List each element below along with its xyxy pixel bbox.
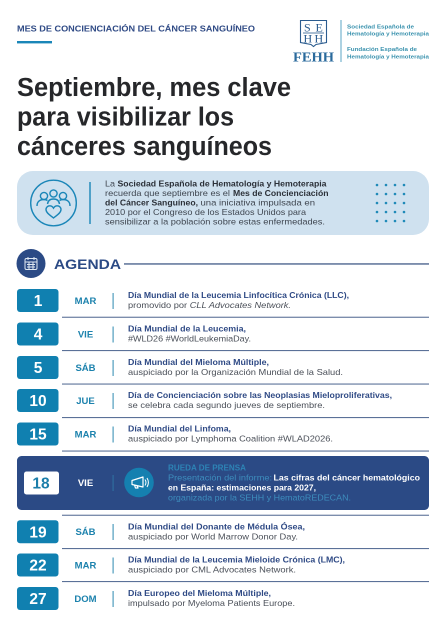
agenda row: 22 MAR: auspiciado por CML Advocates Network.: [128, 565, 296, 575]
intro text: Sociedad Española de Hematología y Hemoterapia: [118, 178, 327, 188]
intro text: [105, 178, 328, 226]
agenda row: 1 MAR: MAR: [75, 296, 96, 307]
agenda row: 15 MAR: auspiciado por Lymphoma Coalition #WLAD2026.: [128, 434, 333, 444]
agenda row: 10 JUE: 10: [29, 393, 47, 410]
logo: SEHH FEHH: H: [304, 32, 312, 46]
press text: RUEDA DE PRENSA: [168, 462, 246, 472]
title: [17, 74, 291, 161]
agenda row: 19 SAB: auspiciado por World Marrow Donor Day.: [128, 532, 298, 542]
agenda row: 1 MAR: [17, 289, 429, 318]
agenda heading: [16, 249, 429, 278]
logo: SEHH FEHH: S: [304, 20, 311, 34]
decorative dots: [376, 184, 405, 222]
title: cánceres sanguíneos: [17, 133, 272, 161]
panel: intro: [17, 171, 429, 235]
agenda row: 1 MAR: 1: [34, 293, 43, 310]
agenda row: 5 SAB: Día Mundial del Mieloma Múltiple,: [128, 357, 269, 367]
agenda row: 27 DOM: 27: [29, 591, 47, 608]
agenda row: 5 SAB: auspiciado por la Organización Mundial de la Salud.: [128, 367, 343, 377]
agenda row: 10 JUE: Día de Concienciación sobre las Neoplasias Mieloproliferativas,: [128, 390, 392, 400]
agenda row: 5 SAB: 5: [34, 360, 43, 377]
intro text: La: [105, 178, 115, 188]
agenda row: 22 MAR: Día Mundial de la Leucemia Mieloide Crónica (LMC),: [128, 555, 345, 565]
title: Septiembre, mes clave: [17, 74, 291, 102]
agenda row: 19 SAB: Día Mundial del Donante de Médula Ósea,: [128, 520, 305, 532]
agenda row: 4 VIE: [17, 322, 429, 351]
icon: megaphone: [124, 468, 154, 497]
agenda row: 4 VIE: #WLD26 #WorldLeukemiaDay.: [128, 334, 251, 344]
icon: calendar: [25, 257, 37, 270]
press text: en España: estimaciones para 2027,: [168, 482, 316, 492]
agenda row: 4 VIE: VIE: [78, 329, 93, 340]
intro text: sensibilizar a la población sobre estas enfermedades.: [105, 216, 325, 226]
agenda row: 15 MAR: MAR: [75, 429, 96, 440]
agenda row: 27 DOM: DOM: [74, 594, 97, 605]
press text: [168, 462, 420, 502]
agenda row: 19 SAB: SÁB: [75, 527, 96, 538]
agenda row: 22 MAR: 22: [29, 558, 47, 574]
logo: SEHH FEHH: Hematología y Hemoterapia: [347, 32, 430, 38]
agenda row: 5 SAB: SÁB: [75, 363, 96, 374]
agenda row: 4 VIE: Día Mundial de la Leucemia,: [128, 324, 246, 334]
press text: Presentación del informe:: [168, 472, 272, 482]
agenda row: 4 VIE: 4: [34, 326, 43, 344]
logo: SEHH FEHH: Fundación Española de: [347, 47, 418, 53]
agenda row: 1 MAR: promovido por CLL Advocates Network.: [128, 300, 291, 310]
agenda row: 27 DOM: impulsado por Myeloma Patients Europe.: [128, 598, 295, 608]
panel: press conference 18 VIE: VIE: [78, 478, 93, 489]
logo: SEHH FEHH: Sociedad Española de: [347, 24, 415, 30]
agenda row: 22 MAR: [17, 554, 429, 582]
press text: organizada por la SEHH y HematoREDECAN.: [168, 492, 351, 502]
logo: SEHH FEHH: FEHH: [293, 50, 335, 65]
panel: press conference 18 VIE: 18: [32, 476, 50, 492]
intro text: Mes de Concienciación: [233, 188, 328, 198]
agenda row: 5 SAB: [17, 356, 429, 385]
header kicker: MES DE CONCIENCIACIÓN DEL CÁNCER SANGUÍNEO: [17, 23, 255, 34]
agenda row: 10 JUE: [17, 389, 429, 418]
intro text: del Cáncer Sanguíneo,: [105, 198, 198, 208]
agenda row: 27 DOM: [17, 587, 295, 610]
panel: press conference 18 VIE: [17, 456, 429, 510]
logo: SEHH FEHH: H: [314, 32, 324, 46]
intro text: una iniciativa impulsada en: [200, 198, 315, 208]
logo: SEHH FEHH: Hematología y Hemoterapia: [347, 54, 430, 60]
agenda row: 10 JUE: se celebra cada segundo jueves de septiembre.: [128, 400, 325, 410]
agenda row: 15 MAR: [17, 422, 429, 452]
agenda row: 1 MAR: Día Mundial de la Leucemia Linfocítica Crónica (LLC),: [128, 290, 349, 300]
title: para visibilizar los: [17, 104, 234, 132]
agenda row: 15 MAR: Día Mundial del Linfoma,: [128, 424, 231, 434]
agenda row: 19 SAB: 19: [29, 524, 47, 541]
agenda row: 15 MAR: 15: [29, 426, 47, 444]
press text: Las cifras del cáncer hematológico: [274, 472, 420, 482]
logo: SEHH FEHH: [293, 20, 430, 65]
agenda row: 19 SAB: [17, 515, 429, 549]
agenda row: 10 JUE: JUE: [76, 396, 95, 407]
agenda row: 27 DOM: Día Europeo del Mieloma Múltiple,: [128, 588, 271, 598]
agenda heading: AGENDA: [54, 257, 121, 272]
agenda row: 22 MAR: MAR: [75, 560, 96, 571]
icon: people with heart: [31, 180, 76, 226]
intro text: recuerda que septiembre es el: [105, 188, 230, 198]
logo: SEHH FEHH: E: [316, 20, 323, 34]
intro text: 2010 por el Congreso de los Estados Unidos para: [105, 207, 306, 217]
